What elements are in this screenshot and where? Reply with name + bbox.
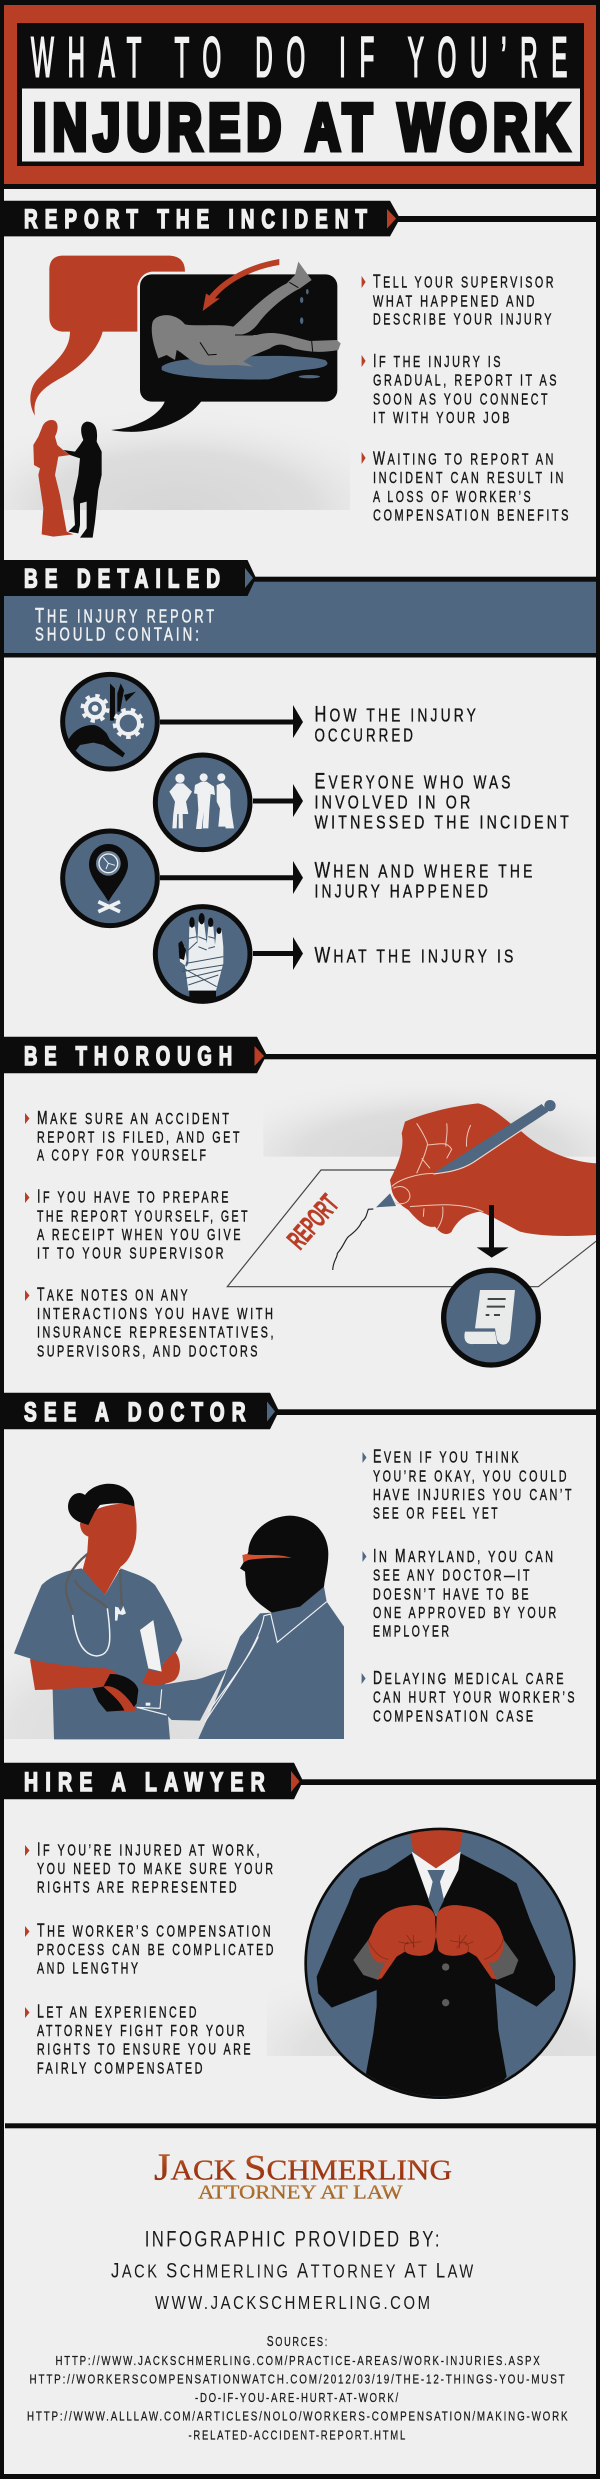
heading: SEE A DOCTOR <box>24 1397 253 1427</box>
title banner <box>4 5 596 184</box>
illustration: hand signing report <box>226 1100 596 1368</box>
bullet: prepare report yourself: IT TO YOUR SUPERVISOR <box>37 1246 226 1263</box>
bullet: gradual injury: IF THE INJURY IS <box>373 351 503 371</box>
icon row: when and where: INJURY HAPPENED <box>314 880 491 901</box>
bullet: experienced attorney <box>25 2001 253 2077</box>
logo: JACK SCHMERLING <box>154 2146 452 2188</box>
bullet: gradual injury <box>362 351 559 427</box>
bullet: process complicated: THE WORKER’S COMPENSATION <box>37 1920 273 1940</box>
section header <box>4 1393 596 1429</box>
arrow <box>160 861 303 894</box>
bullet: take notes: INTERACTIONS YOU HAVE WITH <box>37 1306 276 1323</box>
bullet: you could have injuries <box>362 1447 574 1523</box>
section header <box>4 201 596 236</box>
bullet: take notes <box>25 1285 276 1361</box>
icon row: when and where <box>63 831 536 926</box>
bullet: process complicated <box>25 1920 276 1978</box>
bullet: rights represented: IF YOU’RE INJURED AT WORK, <box>37 1840 262 1860</box>
blue sub-banner: THE INJURY REPORT <box>35 604 217 627</box>
icon row: how the injury occurred: HOW THE INJURY <box>314 702 479 727</box>
sources <box>27 2334 569 2442</box>
section: hire a lawyer <box>4 1763 600 2100</box>
bullet: tell your supervisor <box>362 274 554 325</box>
section header <box>4 1763 596 1799</box>
bullet: you could have injuries: SEE OR FEEL YET <box>373 1506 500 1523</box>
bullet: tell your supervisor: WHAT HAPPENED AND <box>373 293 537 310</box>
icon: bandaged hand <box>155 907 250 1004</box>
blue sub-banner: SHOULD CONTAIN: <box>35 625 202 645</box>
bullet: in maryland <box>362 1546 559 1641</box>
bullet: process complicated: PROCESS CAN BE COMPLICATED <box>37 1942 276 1959</box>
bullet: experienced attorney: LET AN EXPERIENCED <box>37 2001 199 2021</box>
bullet: rights represented: RIGHTS ARE REPRESENTED <box>37 1880 239 1897</box>
blue sub-banner <box>4 581 596 658</box>
bullet: prepare report yourself <box>25 1187 250 1263</box>
icon row: everyone involved <box>155 755 572 850</box>
section: see a doctor <box>0 1393 596 1739</box>
bullet: experienced attorney: FAIRLY COMPENSATED <box>37 2060 205 2077</box>
heading: REPORT THE INCIDENT <box>24 204 374 234</box>
bullet: you could have injuries: EVEN IF YOU THINK <box>373 1447 521 1467</box>
bullet: waiting to report <box>362 448 571 524</box>
bullet: prepare report yourself: IF YOU HAVE TO PREPARE <box>37 1187 231 1207</box>
icon: location pin with clock <box>63 831 157 926</box>
bullet: waiting to report: A LOSS OF WORKER’S <box>373 489 533 506</box>
bullet: rights represented <box>25 1840 276 1897</box>
bullet: experienced attorney: ATTORNEY FIGHT FOR YOUR <box>37 2023 247 2040</box>
heading: BE THOROUGH <box>24 1041 239 1071</box>
bullet: experienced attorney: RIGHTS TO ENSURE YOU ARE <box>37 2042 253 2059</box>
bullet: in maryland: DOESN’T HAVE TO BE <box>373 1586 531 1603</box>
sources: -DO-IF-YOU-ARE-HURT-AT-WORK/ <box>195 2390 400 2405</box>
illustration: lawyer with boxing gloves <box>267 1829 600 2100</box>
report label: REPORT <box>281 1189 345 1255</box>
icon row: what the injury is: WHAT THE INJURY IS <box>314 943 516 968</box>
bullet: accident report filed <box>25 1110 240 1161</box>
bullet: process complicated: AND LENGTHY <box>37 1961 140 1978</box>
sources: -RELATED-ACCIDENT-REPORT.HTML <box>188 2427 407 2442</box>
bullet: delaying care: COMPENSATION CASE <box>373 1708 536 1725</box>
bullet: prepare report yourself: A RECEIPT WHEN YOU GIVE <box>37 1227 243 1244</box>
bullet: prepare report yourself: THE REPORT YOURSELF, GET <box>37 1208 250 1225</box>
illustration: two women talking with speech bubbles <box>3 256 350 538</box>
icon row: everyone involved: EVERYONE WHO WAS <box>314 769 514 794</box>
firm name: JACK SCHMERLING ATTORNEY AT LAW <box>111 2260 476 2283</box>
website: WWW.JACKSCHMERLING.COM <box>155 2292 432 2313</box>
bullet: rights represented: YOU NEED TO MAKE SURE YOUR <box>37 1861 276 1878</box>
heading: HIRE A LAWYER <box>24 1767 272 1797</box>
logo: ATTORNEY AT LAW <box>198 2181 403 2203</box>
bullet: accident report filed: MAKE SURE AN ACCIDENT <box>37 1108 232 1128</box>
icon row: everyone involved: INVOLVED IN OR <box>314 792 474 813</box>
illustration: nurse and patient shaking hands <box>0 1484 344 1739</box>
bullet: accident report filed: REPORT IS FILED, AND GET <box>37 1129 242 1146</box>
bullet: gradual injury: IT WITH YOUR JOB <box>373 410 512 427</box>
bullet: in maryland: EMPLOYER <box>373 1624 452 1641</box>
bullet: take notes: INSURANCE REPRESENTATIVES, <box>37 1325 276 1342</box>
bullet: take notes: TAKE NOTES ON ANY <box>37 1285 190 1305</box>
bullet: accident report filed: A COPY FOR YOURSELF <box>37 1148 208 1165</box>
section header <box>4 1037 596 1073</box>
footer divider <box>5 2123 596 2128</box>
icon row: how the injury occurred <box>63 674 479 769</box>
heading: BE DETAILED <box>24 564 227 594</box>
provided by: INFOGRAPHIC PROVIDED BY: <box>145 2227 442 2252</box>
section: report the incident <box>3 201 596 538</box>
arrow <box>160 705 303 738</box>
section: be thorough <box>4 1037 600 1365</box>
bullet: in maryland: SEE ANY DOCTOR—IT <box>373 1568 532 1585</box>
icon: hand in gears <box>63 674 157 769</box>
arrow <box>253 784 303 817</box>
icon row: how the injury occurred: OCCURRED <box>314 725 416 746</box>
logo <box>154 2146 452 2203</box>
icon: three people <box>155 755 250 850</box>
icon row: what the injury is <box>155 907 516 1004</box>
footer <box>27 2146 569 2442</box>
sources: SOURCES: <box>267 2334 329 2350</box>
arrow <box>253 937 303 970</box>
bullet: take notes: SUPERVISORS, AND DOCTORS <box>37 1344 260 1361</box>
bullet: delaying care <box>362 1670 574 1722</box>
section header <box>4 560 596 596</box>
section: be detailed <box>4 560 596 1004</box>
icon row: when and where: WHEN AND WHERE THE <box>314 857 536 882</box>
